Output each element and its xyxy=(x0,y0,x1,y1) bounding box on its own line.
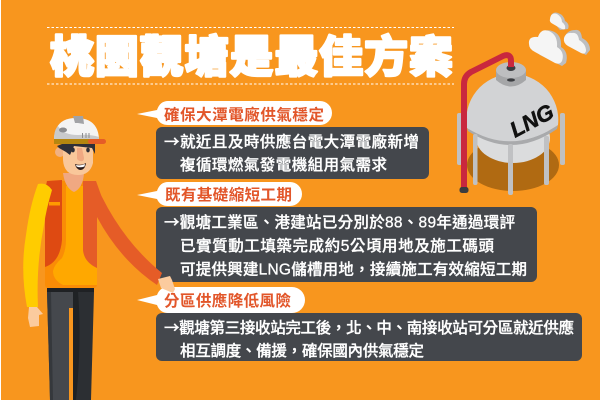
heading bubble 1: 確保大潭電廠供氣穩定 xyxy=(164,105,324,124)
LNG tank: LNG xyxy=(506,99,558,142)
heading bubble 3: 分區供應降低風險 xyxy=(164,291,291,310)
title: 桃園觀塘是最佳方案 xyxy=(50,32,453,82)
heading bubble 2 xyxy=(137,182,302,206)
worker helmet xyxy=(54,116,106,144)
worker right arm xyxy=(97,188,175,293)
heading bubble 3 xyxy=(137,287,305,313)
LNG tank xyxy=(457,55,565,195)
panel: stable gas supply xyxy=(137,101,429,179)
text box 3: →觀塘第三接收站完工後，北、中、南接收站可分區就近供應 xyxy=(164,316,574,338)
panel: zoned supply xyxy=(137,287,582,361)
text box 3: 相互調度、備援，確保國內供氣穩定 xyxy=(180,341,424,360)
text box 3 xyxy=(156,313,582,361)
worker figure xyxy=(23,116,175,400)
text box 2 xyxy=(156,207,537,282)
text box 1: →就近且及時供應台電大潭電廠新增 xyxy=(164,130,419,152)
heading bubble 2: 既有基礎縮短工期 xyxy=(165,185,292,204)
clouds xyxy=(529,13,590,66)
text box 2: 可提供興建LNG儲槽用地，接續施工有效縮短工期 xyxy=(180,260,527,278)
worker torso and vest xyxy=(45,173,105,288)
heading bubble 1 xyxy=(137,101,332,125)
panel: shorter schedule xyxy=(137,182,537,282)
text box 2: →觀塘工業區、港建站已分別於88、89年通過環評 xyxy=(164,210,515,232)
text box 1 xyxy=(156,127,429,179)
worker head xyxy=(55,144,95,175)
text box 1: 複循環燃氣發電機組用氣需求 xyxy=(180,156,387,174)
worker left arm xyxy=(23,184,52,327)
worker pants xyxy=(47,288,94,400)
text box 2: 已實質動工填築完成約5公頃用地及施工碼頭 xyxy=(180,236,494,255)
